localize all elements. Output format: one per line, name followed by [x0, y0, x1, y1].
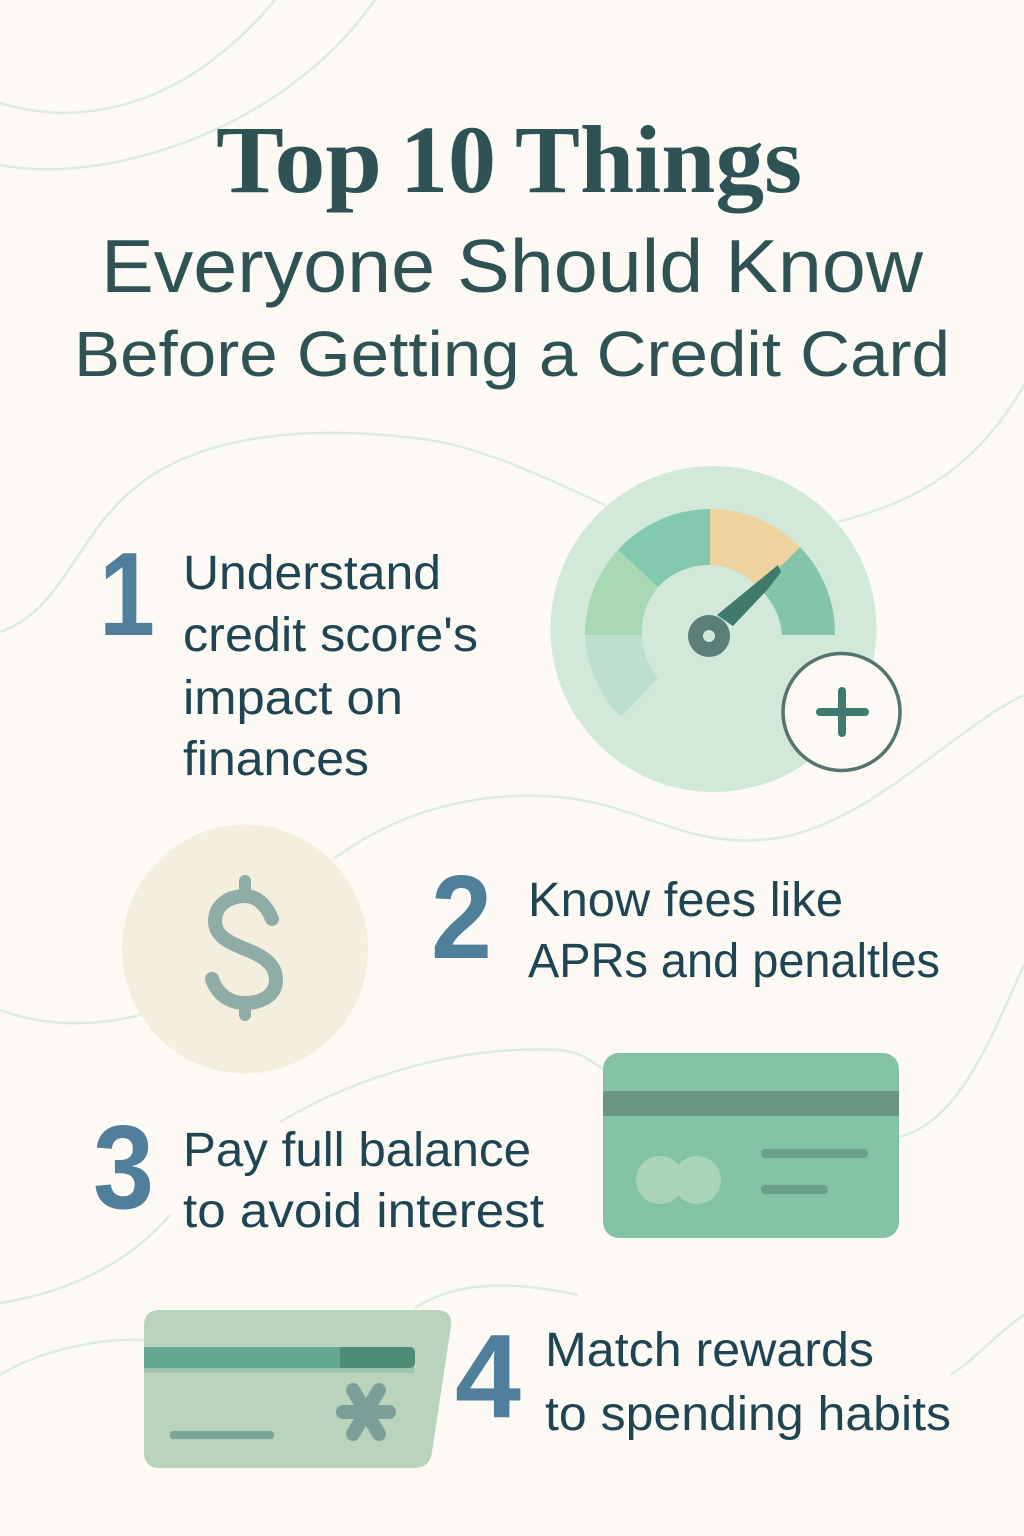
item 3 number: 3 — [93, 1101, 154, 1234]
icon: credit card back — [144, 1310, 451, 1468]
item 2 text: APRs and penaltles — [528, 935, 940, 988]
icon: gauge needle — [717, 565, 781, 626]
item 2 number: 2 — [431, 851, 492, 984]
item 1 text: impact on — [183, 672, 403, 725]
item 1 text: credit score's — [183, 609, 478, 662]
item 3 text: to avoid interest — [183, 1185, 544, 1238]
item 1 text — [183, 547, 478, 786]
heading line 1: 10 — [400, 106, 496, 213]
item 1 text: Understand — [183, 547, 441, 600]
heading line 1 — [216, 106, 802, 213]
item 3 text: Pay full balance — [183, 1124, 531, 1177]
title — [74, 106, 950, 390]
icon: asterisk — [343, 1390, 389, 1434]
item 3 text — [183, 1124, 544, 1238]
heading line 3: Before Getting a Credit Card — [74, 318, 950, 390]
heading line 1: Things — [515, 106, 802, 213]
heading line 2: Everyone Should Know — [101, 224, 924, 308]
item 2 text: Know fees like — [528, 874, 843, 927]
item 1 number: 1 — [99, 528, 155, 661]
item 4 text — [545, 1324, 951, 1441]
item 4 text: Match rewards — [545, 1324, 874, 1377]
icon: credit card front — [603, 1053, 899, 1238]
item 4 text: to spending habits — [545, 1388, 951, 1441]
heading line 1: Top — [216, 106, 382, 213]
item 4 number: 4 — [455, 1310, 521, 1443]
icon: credit score gauge — [550, 466, 900, 792]
icon: plus badge — [783, 654, 900, 770]
icon: dollar coin — [122, 824, 368, 1074]
item 2 text — [528, 874, 940, 988]
icon: gauge hub — [688, 615, 730, 657]
item 1 text: finances — [183, 733, 369, 786]
